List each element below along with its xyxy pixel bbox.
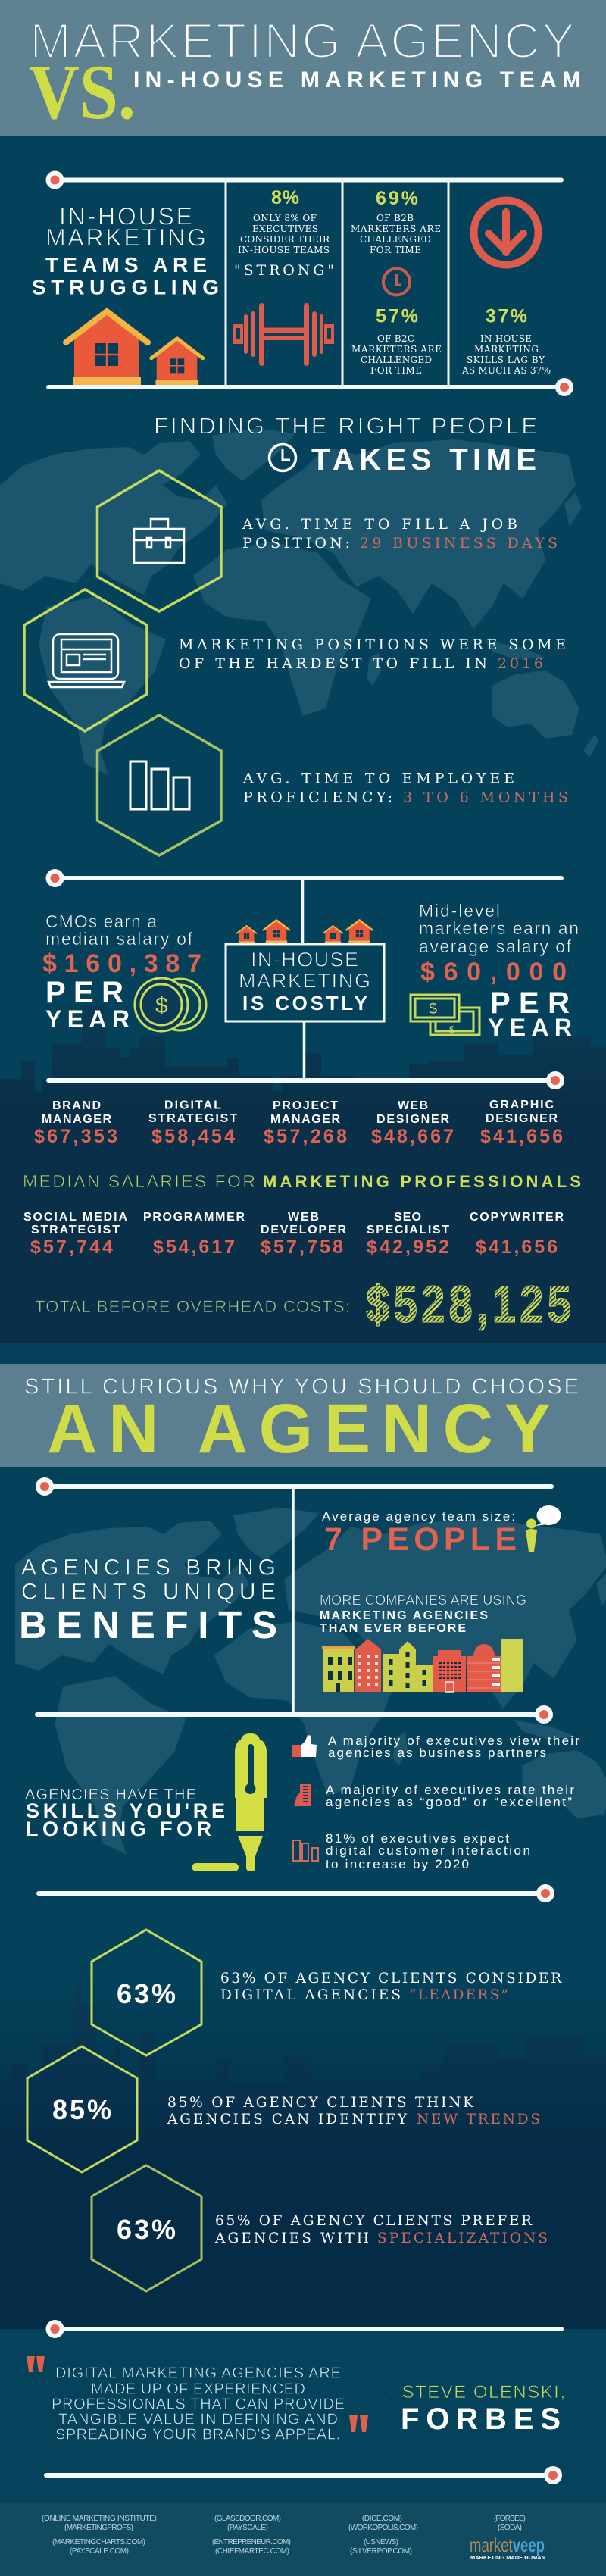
sources column 2: (GLASSDOOR.COM) — [214, 2515, 281, 2523]
stat: team size: Average agency team size: — [322, 1509, 515, 1524]
text — [167, 2095, 540, 2127]
heading: median salaries for marketing professionals: MEDIAN SALARIES FOR — [23, 1171, 255, 1191]
salary: web designer — [371, 1099, 454, 1147]
sources column 3 — [348, 2515, 418, 2556]
text — [328, 1733, 579, 1760]
salary: social media strategist: SOCIAL MEDIA — [23, 1211, 127, 1224]
attribution — [389, 2382, 565, 2436]
divider frame bottom — [46, 378, 573, 396]
text: 29 business days: AVG. TIME TO FILL A JOB — [242, 516, 517, 533]
quote text: DIGITAL MARKETING AGENCIES ARE — [55, 2365, 341, 2382]
heading: agencies bring clients unique benefits: BENEFITS — [19, 1603, 277, 1646]
quote text: MADE UP OF EXPERIENCED — [91, 2381, 305, 2397]
city skyline base fill — [0, 2165, 606, 2329]
attribution: FORBES — [401, 2402, 561, 2436]
text: A majority of executives view their — [328, 1733, 579, 1748]
item: hardest to fill — [24, 589, 566, 731]
quote text: PROFESSIONALS THAT CAN PROVIDE — [52, 2396, 345, 2412]
salary: web developer: DEVELOPER — [261, 1224, 346, 1236]
heading: in-house marketing teams are struggling: IN-HOUSE — [59, 203, 192, 230]
salary: digital strategist: $58,454 — [152, 1126, 235, 1147]
salary: seo specialist: SPECIALIST — [367, 1224, 449, 1236]
text: 29 business days: POSITION: — [242, 535, 350, 552]
stat: 8 percent — [234, 187, 334, 279]
salary: graphic designer — [480, 1099, 563, 1147]
icon: clock — [383, 268, 410, 295]
item: digital customer interaction — [293, 1831, 530, 1871]
stat: 8 percent: EXECUTIVES — [252, 224, 318, 234]
panel: in-house marketing is costly — [42, 869, 579, 1089]
title: vs: VS. — [29, 49, 136, 136]
text: NEW TRENDS — [417, 2112, 540, 2127]
salary: project manager: $57,268 — [264, 1126, 347, 1147]
icon: barbell — [233, 303, 334, 366]
text: mid-level salary — [419, 901, 579, 1041]
panel: in-house teams are struggling — [32, 171, 573, 396]
stat: 57 percent b2c — [351, 306, 442, 376]
salary: web developer: $57,758 — [261, 1236, 343, 1258]
text: SPECIALIZATIONS — [377, 2231, 548, 2246]
text: AGENCIES CAN IDENTIFY — [167, 2112, 408, 2127]
icon: person with speech bubble — [526, 1505, 561, 1552]
sources column 2: (ENTREPRENEUR.COM) — [212, 2538, 291, 2546]
panel: median salaries — [23, 1099, 581, 1333]
sources column 1: (ONLINE MARKETING INSTITUTE) — [42, 2515, 157, 2523]
text: more companies: MORE COMPANIES ARE USING — [320, 1593, 526, 1608]
salary: project manager — [264, 1099, 347, 1147]
item: 63 percent leaders — [92, 1930, 562, 2055]
footer: sources — [0, 2503, 606, 2576]
stat: 37 percent: AS MUCH AS 37% — [461, 365, 551, 376]
text — [326, 1783, 574, 1809]
divider — [36, 1884, 554, 1902]
icon: coins: $ — [155, 993, 168, 1018]
text: agencies as business partners — [328, 1746, 546, 1760]
band: why choose an agency — [0, 1364, 606, 1468]
item: employee proficiency — [97, 715, 568, 855]
stat: 37 percent: IN-HOUSE — [480, 333, 532, 344]
band: why choose an agency: AN AGENCY — [47, 1390, 551, 1468]
panel: skills you're looking for — [25, 316, 579, 1902]
icon: bars — [293, 1840, 318, 1861]
vertical divider — [292, 1488, 295, 1714]
salary: social media strategist — [23, 1211, 127, 1258]
salary: seo specialist — [367, 1211, 449, 1258]
text: cmo salary: $160,387 — [42, 949, 201, 978]
header band: title — [0, 0, 606, 136]
stat: 57 percent b2c: OF B2C — [377, 333, 414, 344]
text: A majority of executives rate their — [326, 1783, 574, 1797]
text: hardest to fill in 2016: 2016 — [498, 655, 543, 672]
hexagon 1 — [97, 470, 221, 611]
callout box: in-house marketing is costly: IN-HOUSE — [251, 949, 358, 971]
salary: project manager: PROJECT — [273, 1099, 338, 1112]
icon: banknotes: $ — [449, 1024, 455, 1036]
logo: marketveep: marketveep — [470, 2534, 545, 2556]
divider bottom — [35, 1705, 553, 1724]
salary: copywriter: $41,656 — [476, 1236, 558, 1258]
row 1 salaries — [34, 1099, 563, 1147]
icon: opening quote — [27, 2356, 45, 2372]
column dividers — [226, 182, 448, 385]
sources column 4 — [494, 2515, 526, 2532]
salary: brand manager: BRAND — [52, 1099, 101, 1112]
sources column 3: (DICE.COM) — [362, 2515, 402, 2523]
divider frame top — [45, 171, 564, 189]
panel: quote — [27, 2320, 565, 2484]
heading: agencies bring clients unique benefits — [19, 1555, 277, 1646]
sources column 3: (SILVERPOP.COM) — [350, 2547, 412, 2556]
salary: digital strategist — [148, 1099, 237, 1147]
text: 3 to 6 months — [242, 770, 568, 806]
title: marketing agency: MARKETING AGENCY — [30, 12, 575, 68]
text: cmo salary: YEAR — [45, 1005, 130, 1033]
text: 81% of executives expect — [326, 1831, 509, 1846]
callout box: in-house marketing is costly: IS COSTLY — [242, 992, 367, 1014]
heading: LOOKING FOR — [26, 1818, 211, 1840]
stat: 37 percent: MARKETING — [474, 344, 539, 355]
text: 85% OF AGENCY CLIENTS THINK — [167, 2095, 474, 2111]
panel: agency client stats — [27, 1930, 562, 2291]
divider top — [45, 2320, 564, 2338]
stat: 8 percent: ONLY 8% OF — [253, 213, 317, 224]
salary: graphic designer: GRAPHIC — [489, 1099, 554, 1111]
salary: web designer: $48,667 — [371, 1126, 454, 1147]
icon: laptop — [48, 634, 124, 687]
stat: 8 percent: CONSIDER THEIR — [240, 234, 330, 245]
salary: programmer: PROGRAMMER — [143, 1211, 245, 1224]
icon: houses — [66, 308, 203, 385]
heading: in-house marketing teams are struggling: TEAMS ARE — [45, 253, 207, 277]
text: hardest to fill in 2016 — [179, 636, 566, 672]
heading: in-house marketing teams are struggling: MARKETING — [45, 224, 206, 252]
text: 3 to 6 months: PROFICIENCY: — [243, 789, 392, 806]
quote text: SPREADING YOUR BRAND'S APPEAL. — [55, 2426, 340, 2443]
stat: 8 percent: IN-HOUSE TEAMS — [238, 245, 330, 255]
text: digital customer interaction — [326, 1843, 530, 1858]
text: “LEADERS” — [409, 1987, 508, 2003]
icon: down arrow — [474, 200, 538, 265]
quote text — [52, 2365, 345, 2443]
sources column 1 — [42, 2515, 157, 2556]
icon: pen — [192, 1733, 267, 1871]
text: 29 business days: 29 BUSINESS DAYS — [360, 535, 558, 552]
text: cmo salary: PER — [45, 976, 123, 1009]
salary: digital strategist: STRATEGIST — [148, 1112, 237, 1125]
divider top — [36, 1477, 554, 1496]
number: 85% — [52, 2094, 111, 2125]
heading: in-house marketing teams are struggling — [32, 203, 219, 299]
stat: 8 percent: 8% — [271, 187, 299, 208]
sources column 1: (MARKETINGCHARTS.COM) — [52, 2538, 145, 2546]
heading: takes time: TAKES TIME — [311, 443, 536, 477]
stat: 69 percent b2b — [351, 188, 441, 255]
hexagon — [92, 2165, 201, 2291]
hexagon 2 — [24, 589, 147, 731]
icon: building — [294, 316, 311, 1806]
stat: team size: 7 PEOPLE — [324, 1521, 517, 1558]
item: business partners — [292, 1733, 579, 1760]
hexagon — [27, 2046, 137, 2172]
quote text: TANGIBLE VALUE IN DEFINING AND — [58, 2411, 338, 2428]
item: 85 percent trends — [27, 2046, 540, 2172]
strip above second band — [0, 1343, 606, 1364]
salary: graphic designer: DESIGNER — [486, 1112, 558, 1125]
heading: agencies bring clients unique benefits: CLIENTS UNIQUE — [21, 1579, 276, 1605]
sources column 3: (WORKOPOLIS.COM) — [348, 2524, 418, 2532]
salary: copywriter: COPYWRITER — [470, 1211, 564, 1224]
heading: in-house marketing teams are struggling: STRUGGLING — [32, 276, 219, 299]
sources column 1: (PAYSCALE.COM) — [70, 2547, 129, 2556]
callout box: in-house marketing is costly — [226, 944, 384, 1021]
text: to increase by 2020 — [326, 1857, 469, 1871]
salary: programmer: $54,617 — [153, 1236, 235, 1258]
stat: 69 percent b2b: 69% — [376, 188, 418, 209]
heading: SKILLS YOU'RE — [26, 1799, 225, 1822]
icon: thumbs up — [292, 1735, 317, 1757]
heading: median salaries for marketing professionals — [23, 1171, 581, 1191]
city skyline background 2 — [0, 1985, 606, 2167]
text: 65% OF AGENCY CLIENTS PREFER — [215, 2213, 533, 2229]
icon: briefcase — [134, 519, 184, 563]
text: mid-level salary: marketers earn an — [419, 918, 579, 938]
sources column 2: (PAYSCALE) — [227, 2524, 268, 2532]
icon: banknotes — [411, 995, 479, 1036]
band: why choose an agency: STILL CURIOUS WHY YOU SHOULD CHOOSE — [24, 1374, 579, 1399]
stat: 57 percent b2c: 57% — [376, 306, 418, 327]
heading: finding the right people: FINDING THE RIGHT PEOPLE — [154, 412, 537, 439]
stat: 37 percent — [461, 306, 551, 376]
heading: AGENCIES HAVE THE — [25, 1787, 196, 1803]
salary: web designer: DESIGNER — [376, 1113, 449, 1126]
sources column 4: (SODA) — [498, 2524, 522, 2532]
panel: agencies bring unique benefits — [19, 1477, 561, 1724]
salary: programmer — [143, 1211, 245, 1258]
text — [220, 1971, 562, 2003]
text: DIGITAL AGENCIES — [220, 1987, 401, 2003]
row 2 salaries — [23, 1211, 564, 1258]
salary: brand manager — [34, 1099, 117, 1147]
text: hardest to fill in 2016: OF THE HARDEST TO FILL IN — [179, 655, 487, 672]
number: 63% — [117, 2214, 176, 2245]
item: time to fill a job — [97, 470, 558, 611]
salary: brand manager: $67,353 — [34, 1126, 117, 1147]
heading: median salaries for marketing professionals: MARKETING PROFESSIONALS — [263, 1172, 581, 1191]
total before overhead costs — [35, 1275, 575, 1333]
panel: finding the right people takes time — [24, 412, 568, 855]
icon: coins — [135, 978, 206, 1031]
world map background 2 — [15, 1508, 606, 1855]
heading — [25, 1787, 225, 1840]
sources column 2 — [212, 2515, 291, 2556]
total before overhead costs: TOTAL BEFORE OVERHEAD COSTS: — [35, 1297, 350, 1316]
divider bottom — [46, 1071, 564, 1089]
sources column 2: (CHIEFMARTEC.COM) — [215, 2547, 289, 2556]
salary: seo specialist: SEO — [394, 1211, 421, 1224]
hexagon — [92, 1930, 201, 2055]
attribution: - STEVE OLENSKI, — [389, 2382, 565, 2402]
stat: 57 percent b2c: CHALLENGED — [361, 355, 432, 365]
salary: seo specialist: $42,952 — [367, 1236, 449, 1258]
sources column 3: (USNEWS) — [364, 2538, 398, 2546]
stat: 37 percent: 37% — [486, 306, 527, 327]
text: more companies: MARKETING AGENCIES — [320, 1609, 488, 1622]
stat: 69 percent b2b: FOR TIME — [370, 245, 421, 255]
text: 3 to 6 months: AVG. TIME TO EMPLOYEE — [242, 770, 514, 786]
hexagon 3 — [97, 715, 221, 855]
salary: brand manager: MANAGER — [42, 1113, 111, 1126]
stat: 69 percent b2b: CHALLENGED — [360, 234, 431, 245]
salary: web developer: WEB — [288, 1211, 319, 1224]
item: good or excellent — [294, 316, 574, 1809]
text: 3 to 6 months: 3 TO 6 MONTHS — [403, 789, 568, 806]
text: 29 business days — [242, 516, 558, 552]
text — [214, 2213, 548, 2246]
text: mid-level salary: $60,000 — [420, 958, 567, 986]
icon: colorful buildings — [322, 1639, 523, 1692]
icon: closing quote — [349, 2415, 368, 2432]
text: more companies — [320, 1593, 526, 1635]
stat: 57 percent b2c: MARKETERS ARE — [351, 344, 442, 355]
salary: copywriter — [470, 1211, 564, 1258]
salary: digital strategist: DIGITAL — [164, 1099, 221, 1112]
icon: small houses — [237, 919, 373, 943]
text: cmo salary: median salary of — [45, 929, 193, 949]
divider top — [45, 869, 564, 887]
text — [326, 1831, 530, 1871]
stat: 69 percent b2b: OF B2B — [376, 213, 414, 224]
salary: social media strategist: $57,744 — [30, 1236, 113, 1258]
text: 63% OF AGENCY CLIENTS CONSIDER — [220, 1971, 562, 1987]
callout box: in-house marketing is costly: MARKETING — [239, 970, 370, 993]
text: cmo salary: CMOs earn a — [45, 911, 157, 931]
world map background 1 — [0, 428, 598, 775]
salary: graphic designer: $41,656 — [480, 1126, 563, 1147]
text: mid-level salary: PER — [490, 986, 570, 1020]
text: mid-level salary: YEAR — [488, 1014, 572, 1041]
icon: clock heading — [270, 444, 295, 471]
sources column 1: (MARKETINGPROFS) — [64, 2524, 133, 2532]
heading: agencies bring clients unique benefits: AGENCIES BRING — [21, 1555, 276, 1580]
salary: web developer — [261, 1211, 346, 1258]
text: hardest to fill in 2016: MARKETING POSITIONS WERE SOME — [179, 636, 566, 653]
text: agencies as “good” or “excellent” — [326, 1795, 572, 1809]
text: more companies: THAN EVER BEFORE — [320, 1622, 466, 1635]
salary: web designer: WEB — [398, 1099, 428, 1112]
text: AGENCIES WITH — [214, 2231, 369, 2246]
icon: bars — [130, 761, 189, 809]
salary: project manager: MANAGER — [270, 1113, 340, 1126]
stat: 37 percent: SKILLS LAG BY — [467, 355, 545, 365]
title: in-house marketing team: IN-HOUSE MARKETING TEAM — [133, 67, 581, 92]
text: mid-level salary: average salary of — [419, 936, 572, 956]
sources column 4: (FORBES) — [494, 2515, 526, 2523]
icon: banknotes: $ — [429, 1001, 437, 1018]
stat: 8 percent: "STRONG" — [234, 262, 334, 279]
city skyline background 1 — [0, 1005, 606, 1106]
text: mid-level salary: Mid-level — [419, 901, 500, 921]
divider bottom — [44, 2466, 562, 2484]
logo: marketveep: MARKETING MADE HUMAN — [470, 2554, 545, 2561]
text: cmo salary — [42, 911, 201, 1033]
stat: 69 percent b2b: MARKETERS ARE — [351, 224, 441, 234]
connector — [303, 879, 305, 1080]
number: 63% — [117, 1978, 176, 2009]
item: 65 percent specializations — [92, 2165, 548, 2291]
stat: 57 percent b2c: FOR TIME — [370, 365, 422, 376]
salary: social media strategist: STRATEGIST — [31, 1224, 120, 1236]
